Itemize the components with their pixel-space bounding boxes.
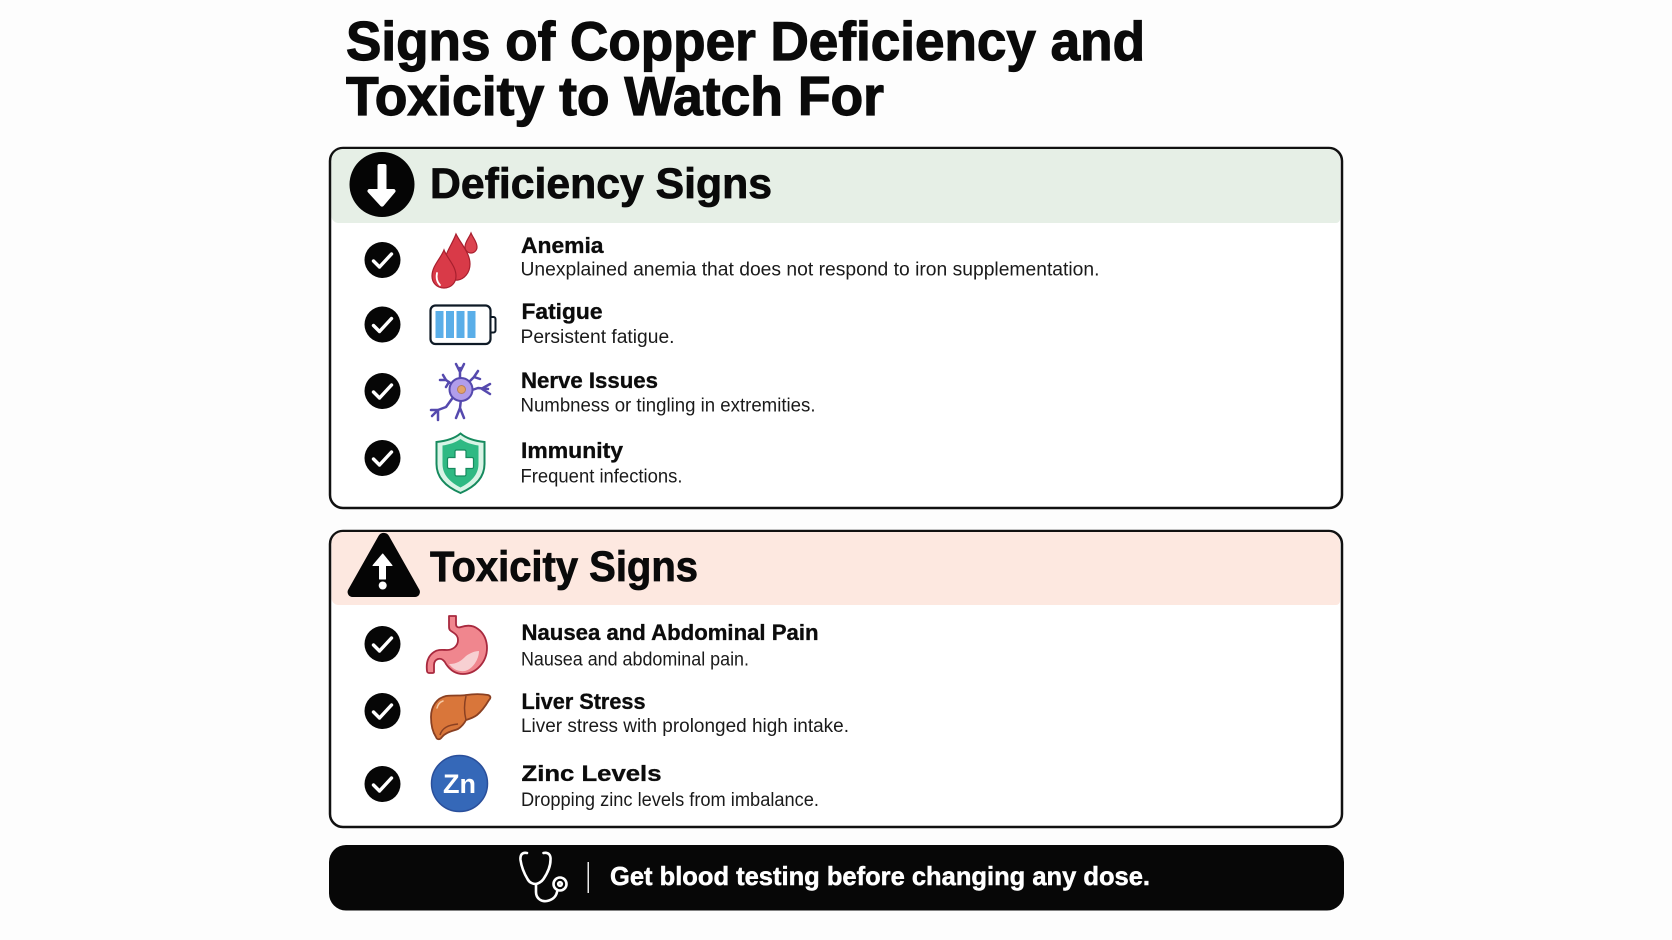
icon: shield with cross [436,434,484,493]
description: fatigue: Persistent fatigue. [520,327,674,348]
row: liver stress [364,689,849,739]
panel: toxicity signs [330,531,1342,827]
check: nausea [364,626,400,662]
panel frame: deficiency [330,148,1342,508]
icon: warning triangle [348,533,420,597]
icon: down arrow in circle [350,152,414,217]
description: zinc levels: Dropping zinc levels from imbalance. [521,790,819,811]
check: nerve issues [364,373,400,409]
check: zinc [364,766,400,802]
header band: deficiency [331,149,1340,223]
callout: blood testing banner [329,845,1344,910]
heading: toxicity signs: Toxicity Signs [430,543,698,591]
icon: stethoscope [520,853,566,901]
icon: stomach [427,616,487,674]
check: anemia [364,242,400,278]
check: fatigue [364,306,400,342]
row: nausea and abdominal pain [364,616,818,674]
row: zinc levels [364,756,819,812]
icon: zinc badge: Zn [443,769,476,799]
check: liver [364,693,400,729]
label: fatigue: Fatigue [522,299,602,324]
icon: neuron [431,364,490,420]
title: Signs of Copper Deficiency and [346,10,1145,72]
heading: deficiency signs: Deficiency Signs [430,160,772,208]
icon: zinc badge [432,756,488,812]
panel frame: toxicity [330,531,1342,827]
icon: liver [431,694,490,739]
label: immunity: Immunity [521,438,623,463]
banner background [329,845,1344,910]
label: liver stress: Liver Stress [522,689,646,714]
description: anemia: Unexplained anemia that does not respond to iron supplementation. [520,260,1100,280]
description: nerve issues: Numbness or tingling in extremities. [520,396,816,416]
row: fatigue [364,299,674,348]
header band: toxicity [331,532,1340,605]
label: nerve issues: Nerve Issues [521,368,658,393]
title: Toxicity to Watch For [346,65,884,127]
icon: battery [430,306,496,344]
title [346,10,1145,127]
label: anemia: Anemia [521,233,604,258]
row: nerve issues [364,364,816,420]
description: nausea: Nausea and abdominal pain. [521,650,749,670]
check: immunity [364,440,400,476]
divider [588,862,589,893]
label: zinc levels: Zinc Levels [522,761,662,786]
panel: deficiency signs [330,148,1342,508]
icon: blood drops [432,233,477,288]
banner text: Get blood testing before changing any dose. [610,861,1150,891]
description: liver stress: Liver stress with prolonged high intake. [521,716,849,737]
label: nausea and abdominal pain: Nausea and Abdominal Pain [522,620,818,645]
row: anemia [364,233,1100,288]
description: immunity: Frequent infections. [520,466,682,488]
row: immunity [364,434,682,493]
